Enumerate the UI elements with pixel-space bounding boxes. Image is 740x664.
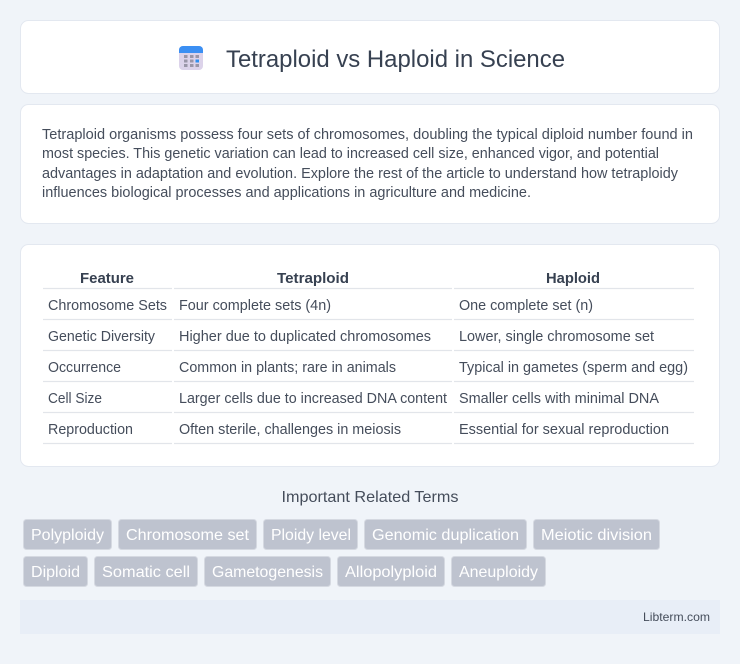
tag [534, 520, 660, 550]
tag: Chromosome set [126, 527, 250, 544]
panel: comparison table [20, 244, 720, 466]
table row: cell size: Larger cells due to increased DNA content [179, 391, 447, 407]
footer [20, 600, 720, 634]
heading: related terms: Important Related Terms [282, 489, 458, 506]
tag: Meiotic division [541, 527, 652, 544]
title: Tetraploid vs Haploid in Science [226, 46, 565, 73]
table header: Tetraploid [277, 271, 349, 287]
tag: Somatic cell [102, 564, 190, 581]
table row: reproduction [48, 422, 669, 438]
table row: reproduction: Essential for sexual reproduction [459, 422, 669, 438]
tag [94, 556, 198, 586]
table row: chromosome sets: One complete set (n) [459, 298, 593, 314]
footer: Libterm.com [643, 610, 710, 624]
tag: Ploidy level [271, 527, 351, 544]
tag: Aneuploidy [459, 564, 538, 581]
tag [118, 520, 256, 550]
text block: introduction: Tetraploid organisms possess four sets of chromosomes, doubling the typical diploid number found in [42, 127, 693, 143]
tag group: related terms [24, 520, 660, 586]
table row: genetic diversity: Genetic Diversity [48, 329, 156, 345]
tag [264, 520, 358, 550]
tag: Gametogenesis [212, 564, 323, 581]
table header [80, 271, 600, 287]
tag [24, 556, 88, 586]
table row: occurrence: Common in plants; rare in animals [179, 360, 396, 376]
table row: occurrence: Occurrence [48, 360, 121, 376]
text block: introduction: most species. This genetic variation can lead to increased cell size, enhanced vigor, and potential [42, 146, 659, 162]
table row: genetic diversity: Higher due to duplicated chromosomes [179, 329, 431, 345]
table row: genetic diversity [48, 329, 654, 345]
tag [338, 556, 444, 586]
text block: introduction [42, 127, 693, 201]
tag: Allopolyploid [345, 564, 437, 581]
table header: Haploid [546, 271, 600, 287]
table row: cell size: Smaller cells with minimal DNA [459, 391, 659, 407]
table row: cell size [48, 391, 659, 407]
text block: introduction: advantages in adaptation and evolution. Explore the rest of the article to understand how tetraploidy [42, 166, 679, 182]
table header: Feature [80, 271, 134, 287]
icon: calendar [179, 46, 203, 70]
tag [24, 520, 112, 550]
table row: chromosome sets [48, 298, 593, 314]
tag [364, 520, 526, 550]
table row: chromosome sets: Four complete sets (4n) [179, 298, 331, 314]
table row: occurrence: Typical in gametes (sperm and egg) [459, 360, 688, 376]
table row: genetic diversity: Lower, single chromosome set [459, 329, 654, 345]
table row: chromosome sets: Chromosome Sets [48, 298, 167, 314]
tag [452, 556, 546, 586]
panel: introduction [20, 104, 720, 224]
panel: header [20, 20, 720, 94]
text block: introduction: influences biological processes and applications in agriculture and medicine. [42, 185, 531, 201]
table row: reproduction: Often sterile, challenges in meiosis [179, 422, 401, 438]
table row: occurrence [48, 360, 688, 376]
tag [204, 556, 330, 586]
tag: Genomic duplication [372, 527, 519, 544]
tag: Diploid [31, 564, 80, 581]
table row: reproduction: Reproduction [48, 422, 133, 438]
tag: Polyploidy [31, 527, 104, 544]
table row: cell size: Cell Size [48, 391, 102, 407]
